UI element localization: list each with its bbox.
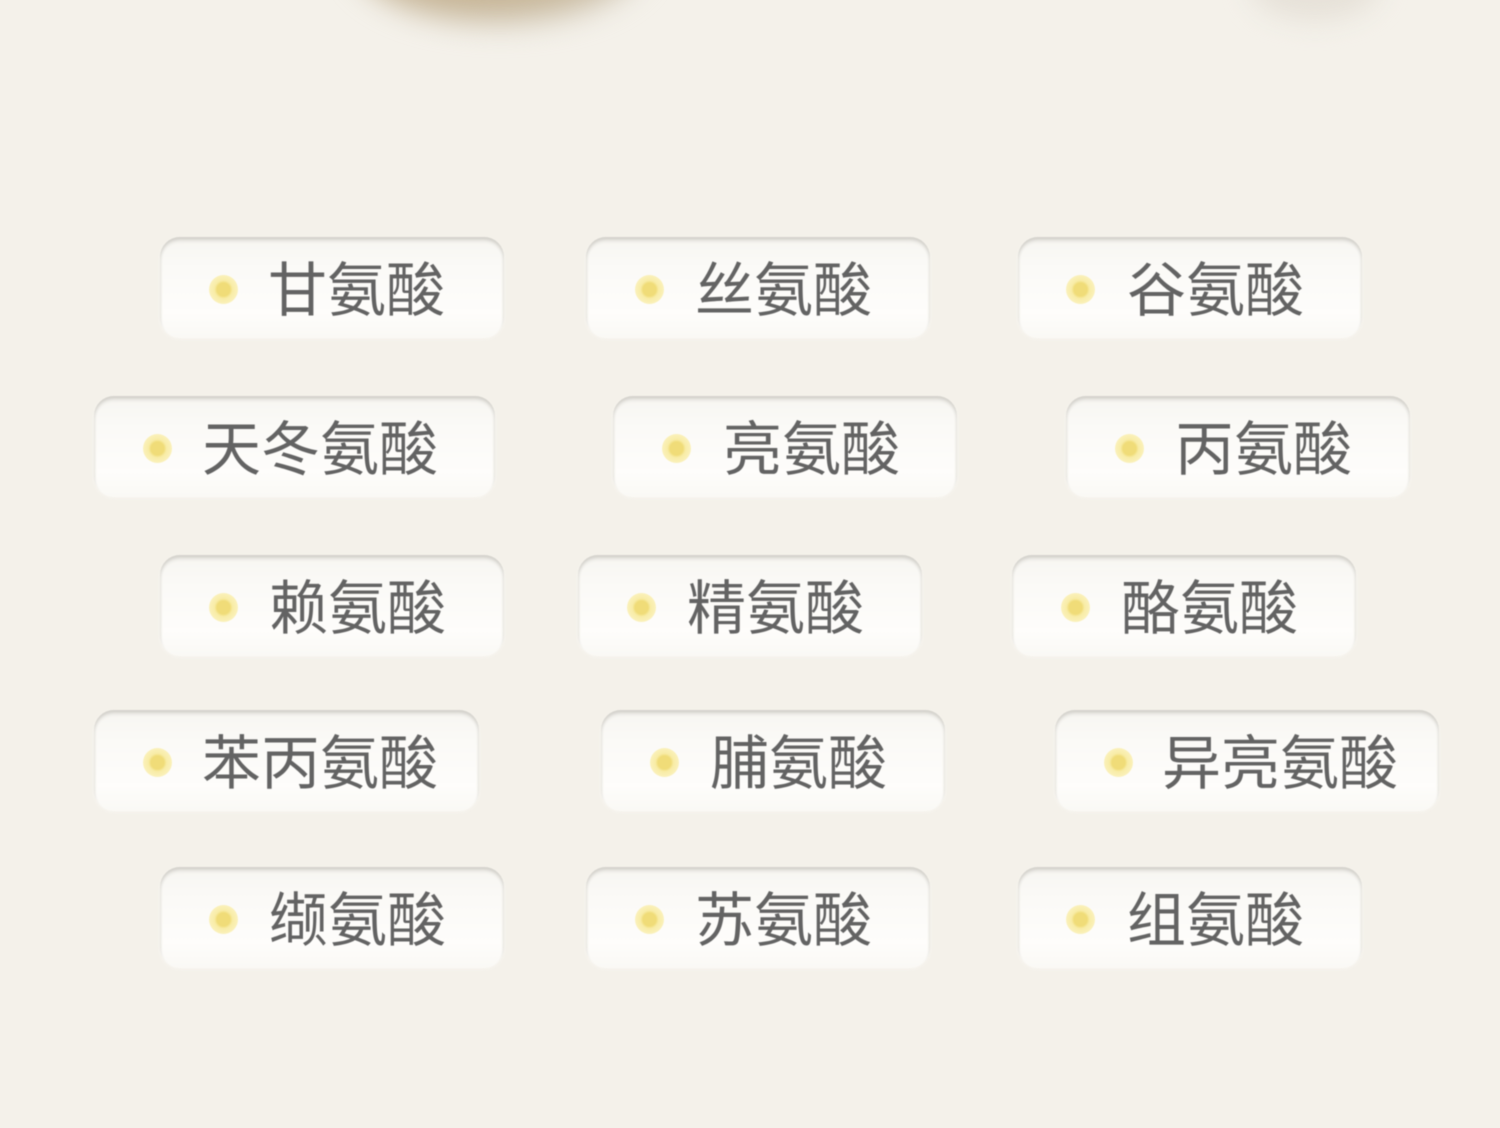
pill: 天冬氨酸: 天冬氨酸	[202, 417, 438, 483]
pill: 丙氨酸	[1066, 396, 1410, 497]
pill: 亮氨酸	[613, 396, 957, 497]
pill: 缬氨酸	[160, 867, 504, 968]
pill: 组氨酸: 组氨酸	[1127, 888, 1304, 954]
pill: 异亮氨酸: 异亮氨酸	[1162, 731, 1398, 797]
pill: 丝氨酸: 丝氨酸	[695, 258, 872, 324]
pill: 谷氨酸: 谷氨酸	[1127, 258, 1304, 324]
pill: 甘氨酸	[160, 237, 504, 338]
pill: 亮氨酸: 亮氨酸	[723, 417, 900, 483]
decorative blurred food shape: left	[350, 0, 650, 25]
pill: 缬氨酸: 缬氨酸	[269, 888, 446, 954]
pill: 天冬氨酸	[94, 396, 495, 497]
pill: 赖氨酸: 赖氨酸	[269, 576, 446, 642]
pill: 丙氨酸: 丙氨酸	[1175, 417, 1352, 483]
pill: 脯氨酸	[601, 710, 945, 811]
pill: 组氨酸	[1018, 867, 1362, 968]
pill: 酪氨酸: 酪氨酸	[1121, 576, 1298, 642]
pill: 酪氨酸	[1012, 555, 1356, 656]
pill: 苯丙氨酸	[94, 710, 479, 811]
pill: 甘氨酸: 甘氨酸	[268, 258, 445, 324]
pill: 精氨酸	[578, 555, 922, 656]
pill: 赖氨酸	[160, 555, 504, 656]
pill: 丝氨酸	[586, 237, 930, 338]
pill: 精氨酸: 精氨酸	[687, 576, 864, 642]
pill: 脯氨酸: 脯氨酸	[710, 731, 887, 797]
decorative blurred food shape: right	[1250, 0, 1380, 20]
pill: 苏氨酸: 苏氨酸	[695, 888, 872, 954]
pill: 谷氨酸	[1018, 237, 1362, 338]
pill: 苯丙氨酸: 苯丙氨酸	[202, 731, 438, 797]
pill: 苏氨酸	[586, 867, 930, 968]
pill: 异亮氨酸	[1055, 710, 1439, 811]
